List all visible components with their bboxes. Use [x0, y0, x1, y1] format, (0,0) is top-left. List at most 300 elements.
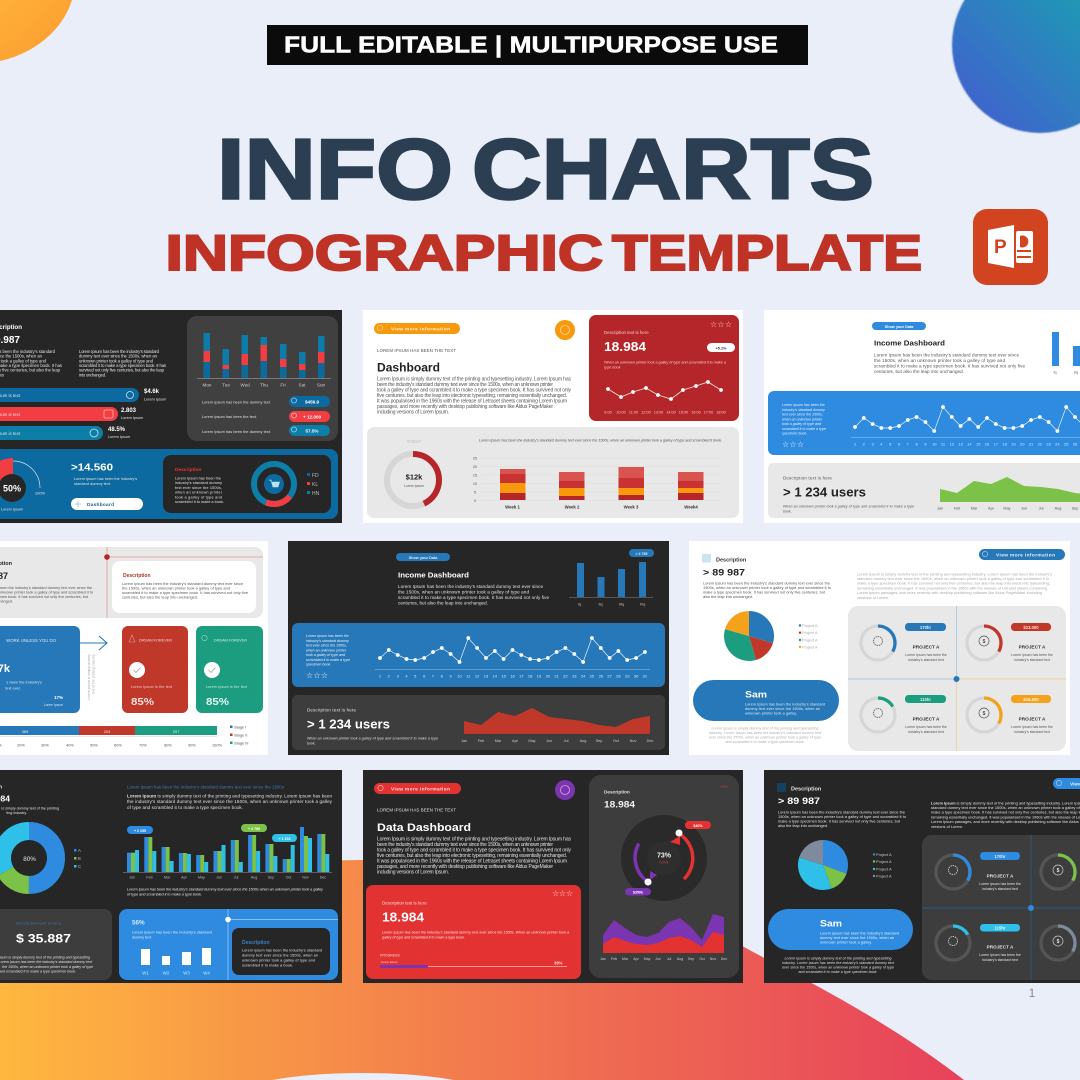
red summary panel: Lorem Ipsum has been the industry's standard dummy text ever since the 1500s. When an unknown printer took a [382, 930, 569, 934]
blue daily line chart panel: 1 [379, 674, 382, 678]
dark users panel: When an unknown printer took a galley of type and scrambled it to make a type [307, 736, 438, 740]
slide 1 blue bottom panel: standard dummy text. [74, 482, 111, 486]
red line chart panel: 17:00 [704, 410, 713, 414]
show your data pill [872, 322, 926, 330]
slide 2 heading: LOREM IPSUM HAS BEEN THE TEXT [377, 348, 456, 353]
slide 9 heading: Description [791, 786, 822, 792]
blue daily line chart panel: 28 [616, 674, 621, 678]
weekly stacked chart [473, 456, 720, 510]
slide 8 paragraph: Lorem Ipsum is simply dummy text of the printing and typesetting industry. Lorem Ipsum has [377, 836, 572, 842]
slide 7 heading: ting industry. [6, 811, 27, 815]
pie chart [798, 840, 892, 890]
income paragraph [398, 584, 549, 606]
donut $12k: Lorem Ipsum [404, 484, 424, 488]
blue daily line chart panel: 26 [599, 674, 604, 678]
blue daily line chart panel: 3 [397, 674, 400, 678]
project ring 1: industry's standard text [908, 658, 944, 662]
gray amount panel: Lorem Ipsum has been the industry's standard dummy text [0, 960, 93, 964]
view more pill: View more information [391, 326, 450, 332]
white italic note: Lorem Ipsum is simply dummy text of the printing and typesetting [784, 956, 892, 960]
project ring 2 [1041, 855, 1075, 889]
stacked area chart: May [644, 957, 651, 961]
project ring 2: industry's standard text [1014, 658, 1050, 662]
blue daily line chart panel: 31 [643, 674, 648, 678]
gauge 50%: Lorem Ipsum [1, 508, 23, 512]
gray users panel: Jul [1039, 506, 1044, 510]
project ring 1: industry's standard text [982, 887, 1018, 891]
red line chart panel: 11:00 [629, 410, 638, 414]
project ring 1: 170hr [994, 854, 1006, 859]
blue daily line chart panel: 14 [967, 442, 972, 446]
red dream card [122, 626, 188, 713]
blue daily line chart panel: 3 [871, 442, 874, 446]
gray radial panel: Description [604, 790, 630, 794]
dark users panel: Sep [596, 739, 602, 743]
show your data pill: Show your Data [409, 556, 438, 560]
dashboard button [71, 498, 143, 510]
blue daily line chart panel: when an unknown printer [782, 417, 823, 421]
blue daily line chart panel: 20 [546, 674, 551, 678]
project grid panel [922, 835, 1080, 980]
slide 1: dark dashboard [0, 310, 342, 523]
slide 1 text column right: into unchanged. [79, 372, 106, 378]
blue daily line chart panel: 16 [510, 674, 515, 678]
description card with donut: Description [175, 467, 201, 473]
title: CHARTS [472, 122, 874, 218]
chart caption [127, 886, 324, 896]
weekly stacked chart: 25 [473, 456, 477, 460]
gray paragraph: Lorem Ipsum is simply dummy text of the printing and typesetting industry. Lorem Ipsum has been the industry's [857, 572, 1052, 576]
gray paragraph [857, 572, 1052, 600]
blue daily line chart panel: 4 [405, 674, 408, 678]
slide 2 paragraph: Lorem Ipsum is simply dummy text of the printing and typesetting industry. Lorem Ipsum has [377, 376, 572, 382]
project ring 3: industry's standard text [908, 730, 944, 734]
project ring 2: PROJECT A [1019, 644, 1046, 650]
blue daily line chart panel: ☆☆☆ [782, 440, 804, 449]
slide 6 heading: > 89 987 [703, 568, 745, 578]
view more pill [374, 323, 460, 334]
radial chart: DONE [659, 860, 670, 864]
top gray panel: scrambled it to make a type specimen book. It has survived not only five [122, 590, 248, 595]
grouped bar chart: Sep [268, 876, 274, 880]
project ring 3: Lorem Ipsum has been the [979, 953, 1021, 957]
slide 1 text column right: unknown printer took a galley of type and [79, 358, 154, 364]
blue bars panel: Lorem Ipsum has been the industry's standard [132, 930, 212, 934]
legend stages: Stage II [234, 732, 247, 738]
slide 8 paragraph: five centuries, but also the leap into electronic typesetting, remaining essentially unchanged. [377, 853, 567, 859]
blue daily line chart panel: 7 [907, 442, 910, 446]
subtitle [166, 225, 922, 281]
gray amount panel: and scrambled it to make a type specimen book. [0, 970, 76, 974]
grouped bar chart: Jul [234, 876, 239, 880]
dark users panel: > 1 234 users [307, 718, 390, 732]
grouped bar chart: Dec [320, 876, 326, 880]
gray paragraph: standard dummy text ever since the 1500s, when an unknown printer took a galley of type and scrambled it to [857, 576, 1049, 581]
stacked area chart: Feb [611, 957, 617, 961]
blue daily line chart panel: 30 [634, 674, 639, 678]
project ring 4 [967, 695, 1053, 734]
stacked area chart: Jan [600, 957, 606, 961]
gray users panel: Aug [1055, 506, 1061, 510]
description card with donut: text ever since the 1500s, [175, 486, 222, 490]
Sam pill: Sam [820, 918, 842, 930]
gray paragraph: versions of Lorem. [857, 595, 889, 600]
slide 1 chart panel: + 12.000 [303, 414, 321, 420]
gray users panel: When an unknown printer took a galley of type and scrambled it to make a type [783, 504, 914, 508]
red line chart panel: Description text is here [604, 330, 649, 335]
project ring 1: 170hr [920, 625, 931, 630]
blue daily line chart panel: 12 [475, 674, 480, 678]
slide 6 paragraph: 1500s, when an unknown printer took a galley of type and scrambled it to [703, 585, 831, 590]
blue daily line chart panel: 24 [581, 674, 586, 678]
project ring 4: Lorem Ipsum has been the [1011, 725, 1053, 729]
top gray panel: unknown printer took a galley of type and scrambled it to [0, 590, 93, 594]
red line chart panel: 12:00 [641, 410, 651, 414]
grouped bar chart: + 1 233 [278, 837, 291, 841]
red dream card: Lorem Ipsum is the text [131, 685, 172, 689]
project ring 4 [1041, 926, 1075, 960]
gray italic note: Lorem Ipsum is simply dummy text of the printing and typesetting [712, 726, 819, 730]
pie chart: Project A [802, 630, 818, 635]
slide 1 chart panel: Lorem Ipsum has been the dummy text. [202, 400, 271, 404]
blue daily line chart panel: 5 [414, 674, 417, 678]
chart caption: Lorem Ipsum has been the industry's standard dummy text ever since the 1500s when an unknown printer took a galley [127, 886, 324, 892]
blue daily line chart panel: scrambled it to make a type [782, 427, 826, 431]
white italic note [782, 956, 895, 974]
project ring 1: Lorem Ipsum has been the [905, 653, 947, 657]
stacked percent bar: 297 [173, 729, 179, 734]
view more button [1053, 778, 1080, 789]
income paragraph: scrambled it to make a type specimen book. It has survived not only five [398, 595, 549, 600]
slide 1 chart panel: $456.9 [305, 400, 319, 404]
red summary panel: galley of type and scrambled it to make a type book. [382, 936, 465, 940]
top gray panel: Description [123, 573, 151, 579]
slide 6 paragraph: Lorem Ipsum has been the industry's standard dummy text ever since the [703, 580, 830, 586]
slide 6 heading: Description [716, 558, 747, 564]
top paragraph: versions of Lorem. [931, 824, 963, 829]
quarterly bars: Iq [1054, 370, 1056, 374]
blue daily line chart panel: 11 [941, 442, 946, 446]
gray users panel: Mar [971, 506, 978, 510]
donut 80%: B [78, 856, 81, 861]
income paragraph: Lorem Ipsum has been the industry's standard dummy text ever since [874, 352, 1019, 358]
red summary panel: 18.984 [382, 910, 425, 924]
view more pill [374, 783, 461, 794]
project ring 3: PROJECT A [913, 716, 940, 722]
slide 2 paragraph [377, 376, 572, 416]
blue daily line chart panel: 21 [1029, 442, 1034, 446]
stacked percent bar: 70% [139, 742, 147, 748]
red line chart panel: 14:00 [666, 410, 676, 414]
project ring 1 [936, 852, 1021, 891]
slide 1 chart panel [187, 316, 338, 441]
Sam pill: unknown printer took a galley. [820, 941, 872, 945]
project ring 3: Lorem Ipsum has been the [905, 725, 947, 729]
grouped bar chart: Jun [216, 876, 222, 880]
weekly stacked chart: Week4 [684, 504, 698, 510]
slide 9 paragraph: also the leap into unchanged. [778, 823, 828, 828]
blue bars panel: dummy text. [132, 936, 152, 940]
gray radial panel: 18.984 [604, 800, 636, 810]
blue daily line chart panel: 29 [625, 674, 630, 678]
rotated caption: Lorem Ipsum is simply dummy [87, 654, 91, 700]
project ring 1: Lorem Ipsum has been the [979, 882, 1021, 886]
radial chart: 73% [657, 852, 672, 860]
Sam pill [693, 680, 839, 721]
stacked area chart: Oct [699, 957, 705, 961]
project ring 3: 115hr [920, 697, 931, 702]
bottom gradient wave [0, 860, 964, 1080]
income paragraph: centuries, but also the leap into unchanged. [874, 369, 964, 374]
slide 9 paragraph [778, 810, 906, 828]
quarterly bars [1052, 332, 1080, 374]
gray chart panel: Lorem Ipsum has been the industry's standard dummy text ever since the 1500s, when an unknown printer took a galley of type and scrambled it book. [479, 438, 722, 442]
stacked percent bar: 100% [212, 742, 223, 748]
slide 1 horizontal bars: Lorem Ipsum [144, 398, 166, 402]
slide 8 paragraph: took a galley of type and scrambled it to make a type specimen book. It has survived not only [377, 848, 572, 854]
Sam pill: Lorem Ipsum has been the industry's standard [820, 932, 899, 936]
blue bars panel: Lorem Ipsum has been the industry's standard [242, 948, 322, 952]
blue daily line chart panel: 19 [537, 674, 542, 678]
decorative blue gradient circle [952, 0, 1080, 133]
gray users panel: book. [783, 510, 792, 514]
description card with donut: FD [312, 473, 319, 479]
blue daily line chart panel: 27 [607, 674, 613, 678]
blue bars panel: W1 [142, 970, 149, 976]
show your data pill [396, 553, 450, 561]
stacked area chart: Sep [688, 957, 694, 961]
donut 80%: A [78, 848, 81, 853]
blue daily line chart panel: 10 [457, 674, 462, 678]
arrow [80, 636, 107, 650]
gray users panel: Jan [937, 506, 943, 510]
blue daily line chart panel: 18 [528, 674, 533, 678]
stacked percent bar: 30% [41, 742, 49, 748]
dark users panel: book. [307, 742, 316, 746]
blue daily line chart panel: scrambled it to make a type [306, 658, 350, 662]
stacked area chart: Jun [655, 957, 661, 961]
gauge 50%: 50% [3, 484, 21, 494]
project ring 3 [936, 924, 1021, 962]
grouped bar chart: Apr [181, 876, 188, 880]
gray users panel: Description text is here [783, 476, 833, 480]
stacked percent bar: 20% [17, 742, 25, 748]
stacked percent bar [0, 726, 223, 748]
banner: FULL EDITABLE | MULTIPURPOSE USE [284, 32, 778, 58]
weekly stacked bars: Thu [260, 382, 268, 388]
weekly stacked bars: Sat [299, 382, 306, 388]
blue bars panel [119, 909, 338, 980]
grouped bar chart: + 4 789 [248, 827, 260, 831]
dark users panel: Nov [630, 739, 636, 743]
gray amount panel: $ 35.887 [16, 932, 71, 946]
stacked area chart: Jul [667, 957, 671, 961]
description card with donut: Lorem Ipsum has been the [175, 476, 221, 480]
red line chart panel: 15:00 [679, 410, 688, 414]
red summary panel [366, 885, 581, 979]
blue daily line chart panel: 14 [493, 674, 498, 678]
blue daily line chart panel: took a galley of type and [306, 653, 346, 657]
slide 1 horizontal bars: Lorem Ipsum [108, 435, 130, 439]
grouped bar chart [123, 824, 332, 880]
grouped bar chart: Aug [251, 876, 257, 880]
gray users panel: Jun [1021, 506, 1027, 510]
description card with donut: when an unknown printer [175, 491, 223, 495]
gray chart panel [367, 427, 739, 518]
gray users panel: Sep [1072, 506, 1078, 510]
radial chart: $350k [633, 890, 643, 894]
red line chart panel: When an unknown printer took a galley of type and scrambled it to make a [604, 360, 726, 364]
blue bars panel: unknown printer took a galley of type and [242, 958, 315, 962]
slide 2 paragraph: five centuries, but also the leap into electronic typesetting, remaining essentially unchanged. [377, 393, 567, 399]
bottom wave notch [228, 1073, 498, 1080]
stacked percent bar: 50% [90, 742, 98, 748]
gray users panel [768, 463, 1080, 518]
slide 9 paragraph: Lorem Ipsum has been the industry's standard dummy text ever since the [778, 810, 905, 814]
blue work card: Lorem Ipsum [44, 703, 63, 707]
blue daily line chart panel: 17 [519, 674, 524, 678]
weekly stacked chart: Week 3 [624, 504, 639, 510]
red line chart panel: 13:00 [654, 410, 663, 414]
red summary panel: ☆☆☆ [552, 889, 573, 898]
description card with donut: industry's standard dummy [175, 481, 222, 485]
red line chart panel [589, 315, 739, 421]
blue daily line chart panel: 25 [590, 674, 595, 678]
weekly stacked bars [197, 333, 331, 388]
blue daily line chart panel: 26 [1073, 442, 1078, 446]
grouped bar chart: Nov [302, 876, 309, 880]
show your data pill: Show your Data [885, 325, 914, 329]
blue daily line chart panel: 21 [554, 674, 560, 678]
gray italic note: ever since the 1500s, when an unknown printer took a galley of type [709, 736, 821, 740]
top gray panel: been the industry's standard dummy text ever since the [0, 586, 92, 590]
slide 8: dark data dashboard [363, 770, 743, 983]
quarterly bar chart: IIq [598, 602, 602, 606]
blue daily line chart panel: 19 [1011, 442, 1016, 446]
stacked percent bar: 60% [114, 742, 122, 748]
blue daily line chart panel: 8 [441, 674, 444, 678]
slide 6 paragraph: make a type specimen book. It has survived not only five centuries, but [703, 590, 826, 594]
legend stages: Stage III [234, 740, 248, 746]
top gray panel: the 1500s, when an unknown printer took a galley of type and [122, 586, 230, 590]
blue daily line chart panel: 7 [432, 674, 435, 678]
view more pill: View more information [391, 786, 450, 792]
slide 2 paragraph: including versions of Lorem Ipsum. [377, 410, 449, 416]
blue daily line chart panel [292, 623, 665, 687]
slide 8 paragraph: been the industry's standard dummy text ever since the 1500s, when an unknown printer [377, 842, 553, 848]
slide 5: dark income dashboard [288, 541, 669, 755]
weekly stacked chart: 10 [473, 482, 477, 486]
blue daily line chart panel: 23 [572, 674, 577, 678]
stacked percent bar: 90% [188, 742, 196, 748]
project ring 3: 115hr [995, 926, 1006, 930]
blue daily line chart panel: 18 [1002, 442, 1008, 446]
income paragraph: Lorem Ipsum has been the industry's standard dummy text ever since [398, 584, 543, 589]
project ring 1 [861, 623, 947, 662]
blue daily line chart panel: 10 [932, 442, 937, 446]
slide 6 paragraph: also the leap into unchanged. [703, 594, 753, 599]
blue daily line chart panel: 8 [915, 442, 918, 446]
project ring 1: PROJECT A [987, 874, 1014, 878]
dark users panel: Feb [478, 739, 484, 743]
blue daily line chart panel: 20 [1020, 442, 1025, 446]
weekly stacked bars: Tue [222, 382, 230, 388]
slide 1 horizontal bars: 2.803 [121, 408, 137, 414]
slide 1 text column right: dummy text ever since the 1500s, when an [79, 354, 158, 358]
blue bars panel: 56% [132, 920, 145, 926]
subtitle: TEMPLATE [612, 225, 922, 281]
gray italic note: and scrambled it to make a type specimen book. [726, 740, 805, 744]
blue daily line chart panel: 9 [924, 442, 927, 446]
Sam pill: dummy text ever since the 1500s, when an [820, 936, 894, 940]
blue daily line chart panel: 1 [854, 442, 857, 446]
slide 7 heading: is simply dummy text of the printing [1, 806, 59, 810]
red summary panel: Lorem Ipsum [381, 960, 398, 964]
blue daily line chart panel: 16 [985, 442, 990, 446]
weekly stacked chart: 0 [474, 499, 476, 503]
icon: PowerPoint: P [994, 237, 1007, 258]
slide 1 blue bottom panel: Lorem Ipsum has been the industry's [74, 477, 137, 481]
blue daily line chart panel: when an unknown printer [306, 648, 347, 652]
view more button [979, 549, 1065, 560]
grouped bar chart: May [198, 876, 205, 880]
rotated caption: text of the printing industry [92, 654, 96, 694]
project ring 3: PROJECT A [987, 944, 1014, 950]
banner [267, 25, 808, 65]
donut $12k [387, 454, 439, 506]
quarterly bar chart: IVq [640, 602, 645, 606]
slide 1 horizontal bars [0, 388, 166, 440]
weekly stacked bars: Sun [317, 382, 326, 388]
stacked area chart [600, 914, 727, 961]
project ring 4: $15.500 [1023, 697, 1039, 702]
donut $12k: $12k [406, 472, 423, 482]
gray radial panel [589, 775, 739, 978]
chart caption: of type and scrambled it to make a type book. [127, 892, 202, 896]
donut 80%: C [78, 864, 81, 869]
income paragraph: centuries, but also the leap into unchanged. [398, 600, 488, 606]
quarterly bar chart: IIIq [619, 602, 624, 606]
blue daily line chart panel: 13 [958, 442, 964, 446]
blue daily line chart panel: 22 [1038, 442, 1043, 446]
red dream card: 85% [131, 697, 154, 708]
slide 7 intro text [127, 784, 333, 810]
blue daily line chart panel: text ever since the 1500s, [782, 412, 823, 416]
gray radial panel: ↑ +4% [717, 785, 728, 789]
icon: purple user circle [555, 780, 575, 800]
icon: user circle [555, 320, 575, 340]
slide 2 paragraph: been the industry's standard dummy text ever since the 1500s, when an unknown printer [377, 382, 553, 388]
green dream card: Lorem Ipsum is the text [206, 685, 247, 689]
green dream card: DREAM FOREVER [214, 638, 247, 642]
title [217, 122, 874, 218]
slide 9 heading: > 89 987 [778, 796, 820, 807]
stacked area chart: Dec [721, 957, 727, 961]
pie chart: Project A [876, 874, 892, 878]
project ring 2: $ [1057, 868, 1060, 874]
project grid panel [848, 606, 1066, 751]
stacked area chart: Aug [677, 957, 683, 961]
red line chart panel: 9:00 [604, 410, 612, 414]
green dream card: 85% [206, 697, 229, 708]
slide 1 text column right: Lorem Ipsum has been the industry's standard [79, 349, 160, 354]
income heading: Income Dashboard [874, 338, 945, 348]
grouped bar chart: Oct [286, 876, 291, 880]
blue daily line chart panel: 23 [1046, 442, 1052, 446]
slide 1 horizontal bars: Lorem Ipsum [121, 416, 143, 420]
icon: PowerPoint [973, 209, 1048, 285]
pie chart: Project A [802, 623, 818, 628]
